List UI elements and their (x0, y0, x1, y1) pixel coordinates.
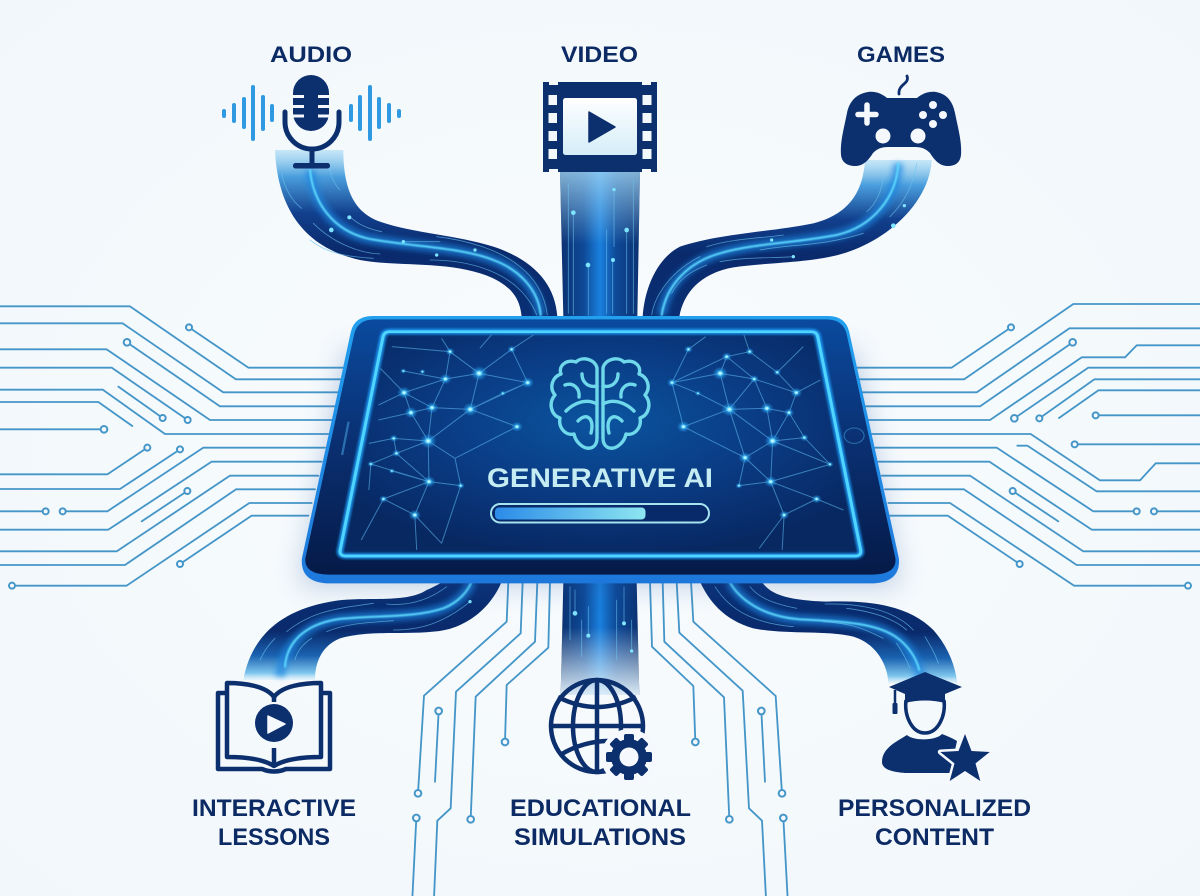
label: Interactive Lessons: LESSONS (218, 824, 330, 851)
data stream: tablet to personalized content (700, 582, 957, 683)
side slot (342, 422, 349, 455)
tablet drop shadow (300, 350, 900, 585)
icon: brain (551, 359, 649, 448)
label: Personalized Content: CONTENT (875, 824, 994, 851)
data stream: video to tablet (560, 172, 640, 317)
tablet: Generative AI screen (302, 316, 899, 583)
label: Personalized Content: PERSONALIZED (838, 795, 1031, 822)
label: Educational Simulations: SIMULATIONS (514, 824, 686, 851)
label: Educational Simulations (510, 795, 691, 851)
label: Video: VIDEO (561, 42, 638, 67)
label: Games: GAMES (857, 42, 945, 67)
label: Interactive Lessons (192, 795, 356, 851)
label: Audio: AUDIO (270, 42, 352, 67)
neural network right (667, 335, 843, 550)
data stream: audio to tablet (275, 150, 557, 317)
screen frame (340, 332, 861, 556)
progress bar (491, 504, 709, 522)
label: Educational Simulations: EDUCATIONAL (510, 795, 691, 822)
data stream: tablet to interactive lessons (243, 582, 502, 680)
label: Personalized Content (838, 795, 1031, 851)
label: Interactive Lessons: INTERACTIVE (192, 795, 356, 822)
circuit traces: bottom left (412, 582, 550, 896)
circuit traces: left (0, 306, 343, 589)
heading: Generative AI: GENERATIVE AI (487, 463, 713, 493)
data stream: tablet to educational simulations (561, 582, 639, 695)
icon: film strip with play button (543, 82, 657, 172)
circuit traces: right (857, 304, 1200, 589)
icon: open book with play button (218, 683, 330, 772)
icon: microphone with sound waves (222, 75, 401, 168)
home button (844, 428, 864, 443)
icon: globe with gear (551, 680, 657, 785)
neural network left (361, 335, 534, 550)
icon: game controller (841, 76, 961, 166)
data stream: games to tablet (643, 160, 932, 317)
circuit traces: bottom right (650, 582, 788, 896)
tablet body (302, 316, 899, 583)
icon: graduate with star (882, 672, 990, 781)
